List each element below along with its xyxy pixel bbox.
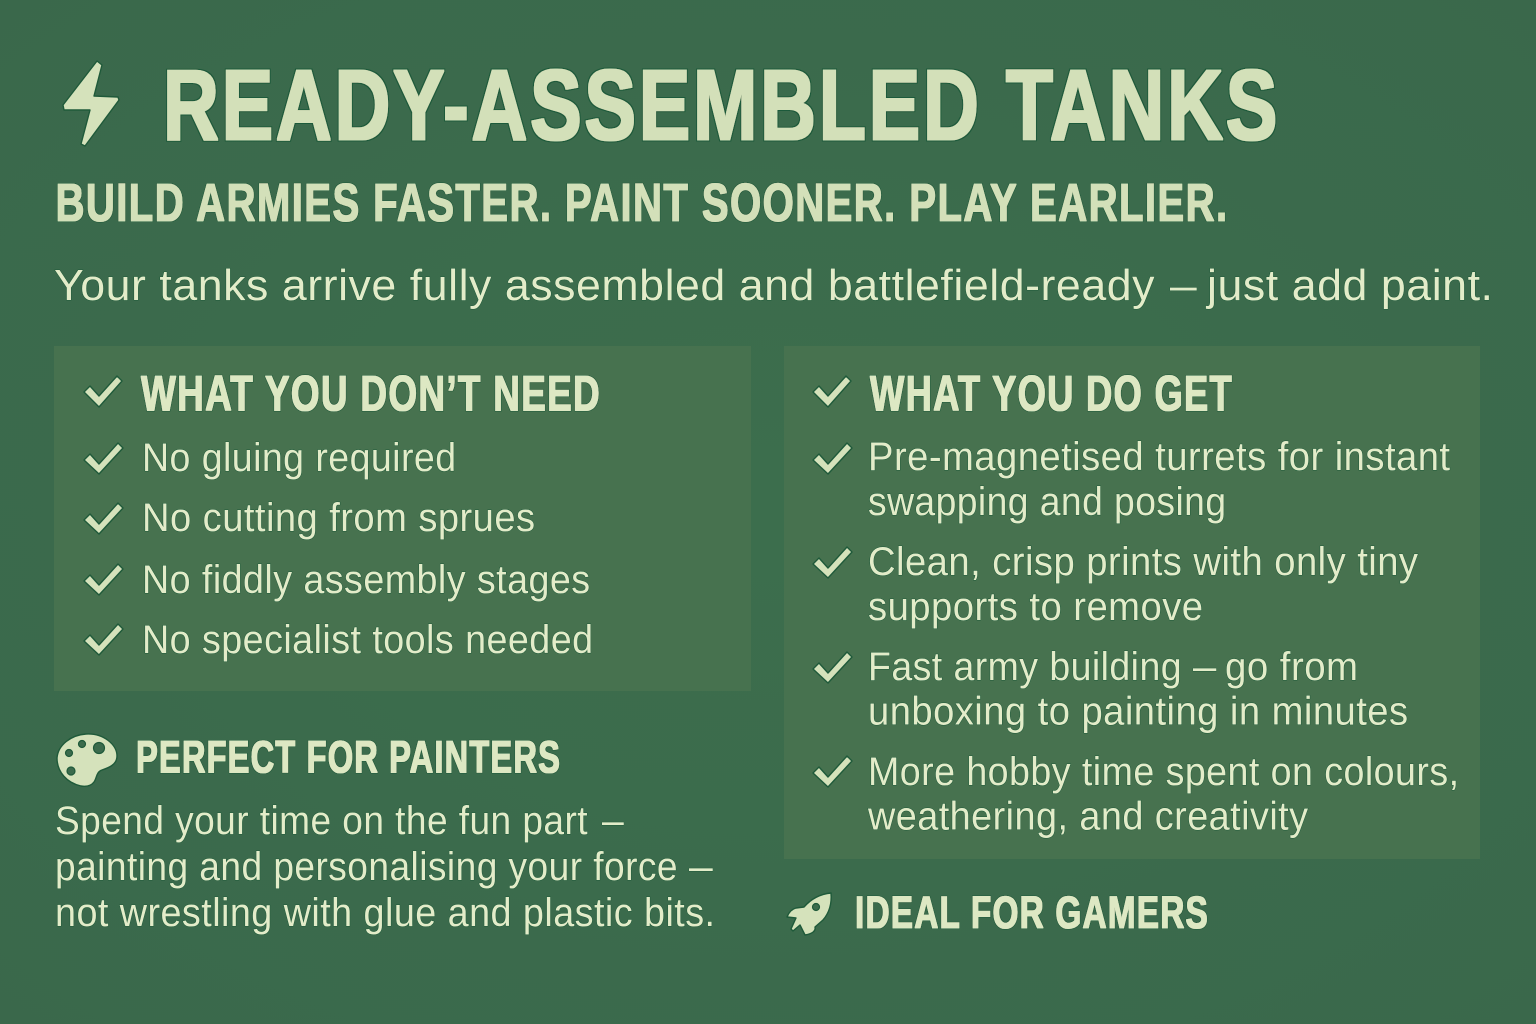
list item: clean prints: supports to remove [868,585,1204,629]
text block: painters description: Spend your time on the fun part [55,799,588,843]
icon: paint palette [57,734,117,786]
list item: pre-magnetised turrets [813,435,1450,524]
list item: more hobby time [813,750,1460,838]
list item: fast army building: — [1193,645,1216,689]
list item: more hobby time: More hobby time spent on colours, [868,750,1460,794]
list item: no fiddly assembly: No fiddly assembly stages [142,558,590,602]
tagline: just add paint. [1205,261,1494,310]
list item: clean prints: Clean, crisp prints with only tiny [868,540,1418,584]
panel: what you do get [784,346,1480,859]
panel heading: WHAT YOU DO GET [870,366,1233,422]
icon: heading check [84,376,122,407]
tagline: — [1170,261,1197,310]
list item: fast army building: unboxing to painting in minutes [868,690,1408,734]
icon: heading check [813,376,851,407]
text block: painters description: — [689,845,713,889]
panel heading: WHAT YOU DON’T NEED [141,366,601,422]
list item: no cutting: No cutting from sprues [142,496,536,540]
heading: perfect for painters: PERFECT FOR PAINTERS [136,732,561,782]
list item: fast army building [813,645,1408,734]
text block: painters description [55,799,716,935]
list item: more hobby time: weathering, and creativity [867,794,1308,838]
text block: painters description: — [602,799,624,843]
list item: pre-magnetised turrets: Pre-magnetised turrets for instant [868,435,1450,479]
icon: lightning bolt [63,61,119,146]
list item: fast army building: go from [1225,645,1358,689]
list item: no gluing: No gluing required [142,436,456,480]
tagline: Your tanks arrive fully assembled and battlefield-ready [54,261,1155,310]
list item: no specialist tools: No specialist tools needed [142,618,594,662]
text block: painters description: painting and personalising your force [55,845,678,889]
list item: pre-magnetised turrets: swapping and posing [868,480,1226,524]
text block: painters description: not wrestling with glue and plastic bits. [55,891,716,935]
list item: clean prints [813,540,1418,629]
icon: rocket [787,893,831,935]
list item: fast army building: Fast army building [868,645,1182,689]
panel: what you don't need [54,346,751,691]
heading: ideal for gamers: IDEAL FOR GAMERS [855,887,1209,938]
